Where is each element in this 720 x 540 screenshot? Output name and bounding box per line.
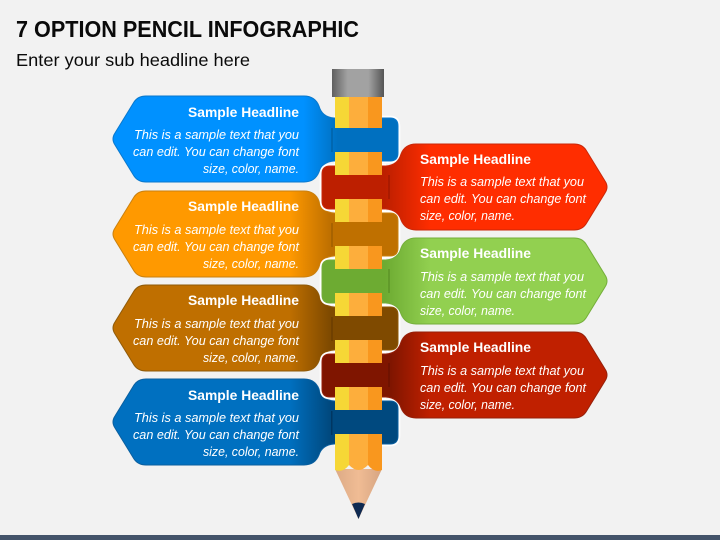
panel: option 2 orange: This is a sample text that you [134,223,299,237]
panel: option 2 orange [113,191,398,277]
panel: option 4 dark blue: size, color, name. [203,445,299,459]
pencil segment 5 [335,293,382,316]
title: 7 OPTION PENCIL INFOGRAPHIC [16,16,359,42]
panel: option 4 dark blue: Sample Headline [188,387,299,403]
panel: option 2 orange: can edit. You can change font [133,240,300,254]
pencil segment 7 [335,387,382,410]
panel: option 4 dark blue: can edit. You can change font [133,428,300,442]
pencil lead [352,502,365,519]
panel: option 6 green: Sample Headline [420,245,531,261]
panel: option 2 orange: Sample Headline [188,198,299,214]
panel: option 6 green: This is a sample text that you [420,270,584,284]
panel: option 5 red: can edit. You can change font [420,192,587,206]
panel: option 6 green: size, color, name. [420,304,515,318]
panel: option 1 blue [113,96,398,182]
panel: option 1 blue: This is a sample text that you [134,128,299,142]
panel: option 1 blue: can edit. You can change font [133,145,300,159]
panel: option 3 brown: size, color, name. [203,351,299,365]
pencil segment 3 [335,199,382,222]
panel: option 3 brown: can edit. You can change font [133,334,300,348]
panel: option 4 dark blue [113,379,398,465]
panel: option 7 dark red: can edit. You can change font [420,381,587,395]
pencil segment 2 [335,152,382,175]
panel: option 2 orange: size, color, name. [203,257,299,271]
pencil segment 6 [335,340,382,363]
panel: option 6 green [322,238,607,324]
icon: pencil [332,69,384,519]
subtitle: Enter your sub headline here [16,50,250,70]
panel: option 1 blue: Sample Headline [188,104,299,120]
panel: option 5 red: size, color, name. [420,209,515,223]
panel: option 7 dark red [322,332,607,418]
panel: option 1 blue: size, color, name. [203,162,299,176]
panel: option 6 green: can edit. You can change font [420,287,587,301]
panel: option 4 dark blue: This is a sample text that you [134,411,299,425]
panel: option 3 brown [113,285,398,371]
panel: option 7 dark red: This is a sample text that you [420,364,584,378]
panel: option 5 red [322,144,607,230]
pencil wood tip [335,469,382,519]
pencil lower body with scallops [335,434,382,471]
panel: option 5 red: This is a sample text that you [420,175,584,189]
pencil eraser ferrule [332,69,384,97]
panel: option 3 brown: This is a sample text that you [134,317,299,331]
panel: option 5 red: Sample Headline [420,151,531,167]
panel: option 7 dark red: size, color, name. [420,398,515,412]
footer bar [0,535,720,540]
panel: option 3 brown: Sample Headline [188,292,299,308]
pencil segment 4 [335,246,382,269]
panel: option 7 dark red: Sample Headline [420,339,531,355]
pencil segment 1 [335,97,382,128]
